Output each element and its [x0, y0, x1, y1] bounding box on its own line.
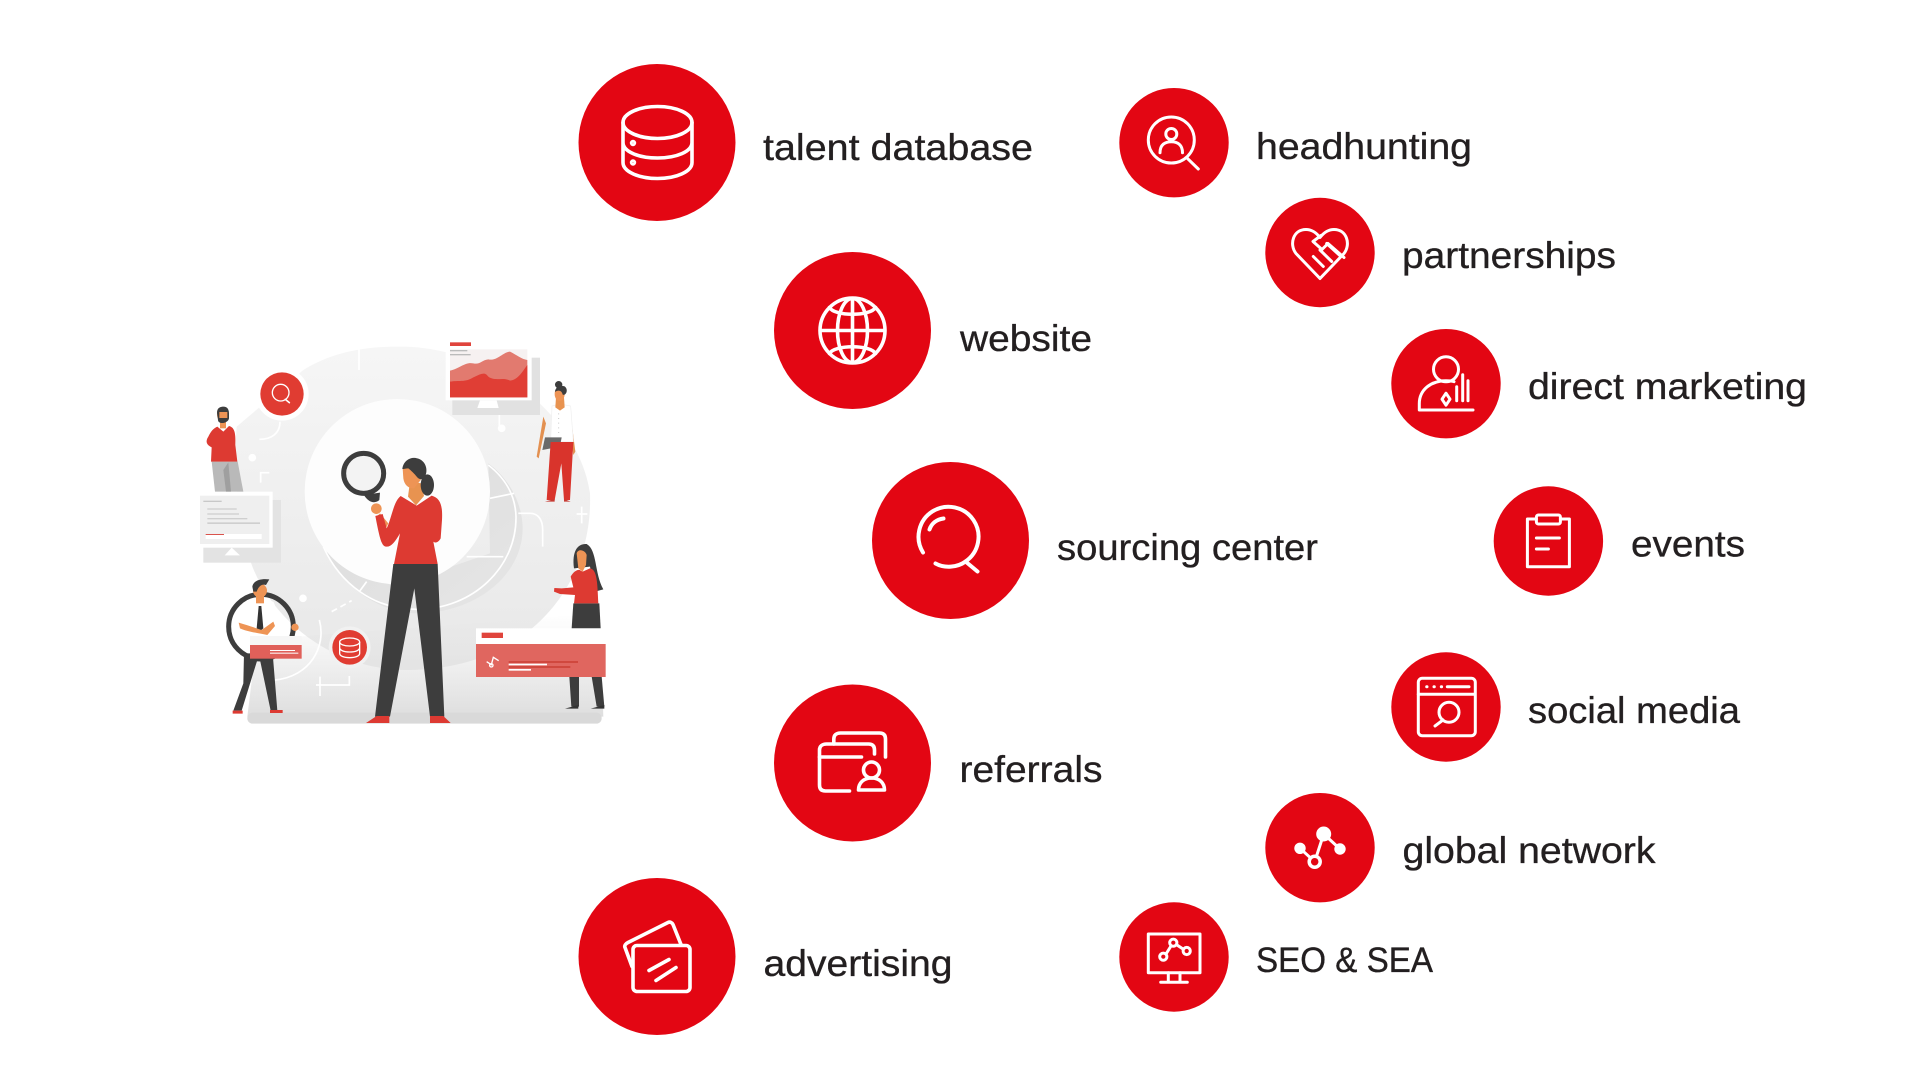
- circle: [1265, 793, 1375, 902]
- database badge: [329, 626, 371, 668]
- circle: [1119, 902, 1229, 1012]
- item: website: [774, 252, 1092, 409]
- circle: [872, 462, 1029, 619]
- circle: [578, 64, 736, 221]
- item: SEO and SEA: [1119, 902, 1434, 1012]
- item: sourcing center: [872, 462, 1318, 619]
- icon: person in magnifier: [1148, 117, 1198, 169]
- woman with clipboard: [537, 381, 575, 502]
- background circle: [235, 347, 590, 670]
- item: direct marketing: [1391, 329, 1807, 438]
- label: advertising: [764, 943, 952, 984]
- item: social media: [1391, 652, 1740, 762]
- spiral shade: [323, 463, 523, 613]
- woman with magnifying glass: [344, 453, 451, 723]
- man holding magnifier ring: [229, 579, 302, 714]
- circle: [1265, 198, 1375, 307]
- icon: browser search: [1418, 678, 1475, 736]
- icon: globe: [820, 298, 885, 363]
- icon: database: [623, 106, 692, 178]
- data card: [476, 628, 606, 677]
- circle: [1391, 652, 1501, 762]
- circle: [774, 684, 931, 842]
- item: headhunting: [1119, 88, 1472, 197]
- chart monitor: [446, 339, 540, 415]
- label: sourcing center: [1057, 527, 1318, 568]
- woman with card: [554, 544, 604, 709]
- item: partnerships: [1265, 198, 1616, 307]
- spiral line: [323, 465, 516, 609]
- label: global network: [1402, 830, 1656, 871]
- icon: heart handshake: [1293, 230, 1347, 278]
- label: events: [1631, 524, 1745, 564]
- circle: [774, 252, 931, 409]
- icon: person with bars: [1419, 357, 1473, 410]
- icon: network nodes: [1294, 826, 1346, 867]
- item: global network: [1265, 793, 1656, 902]
- white central circle: [305, 399, 490, 584]
- label: website: [959, 318, 1092, 359]
- item: referrals: [774, 684, 1102, 842]
- label: SEO & SEA: [1256, 941, 1434, 980]
- label: social media: [1528, 690, 1740, 731]
- icon: ad cards: [625, 922, 690, 992]
- circle: [1391, 329, 1501, 438]
- circle: [1494, 486, 1603, 596]
- label: direct marketing: [1528, 366, 1807, 407]
- label: headhunting: [1256, 126, 1472, 167]
- item: advertising: [578, 878, 952, 1035]
- search badge: [255, 367, 309, 421]
- circle: [1119, 88, 1229, 197]
- man with beard: [207, 407, 243, 492]
- item: events: [1494, 486, 1745, 596]
- illustration: recruiters searching for talent: [196, 335, 613, 724]
- document monitor: [196, 492, 281, 563]
- label: talent database: [763, 127, 1033, 168]
- label: partnerships: [1402, 235, 1616, 276]
- icon: monitor with chart: [1148, 934, 1200, 982]
- item: talent database: [578, 64, 1033, 221]
- icon: cards with person: [820, 733, 886, 791]
- ground bar: [247, 713, 602, 724]
- decorative connectors: [249, 335, 613, 696]
- icon: clipboard: [1527, 515, 1569, 567]
- ground shade: [247, 613, 603, 717]
- circle: [578, 878, 736, 1035]
- icon: magnifier: [919, 507, 979, 572]
- label: referrals: [960, 749, 1102, 790]
